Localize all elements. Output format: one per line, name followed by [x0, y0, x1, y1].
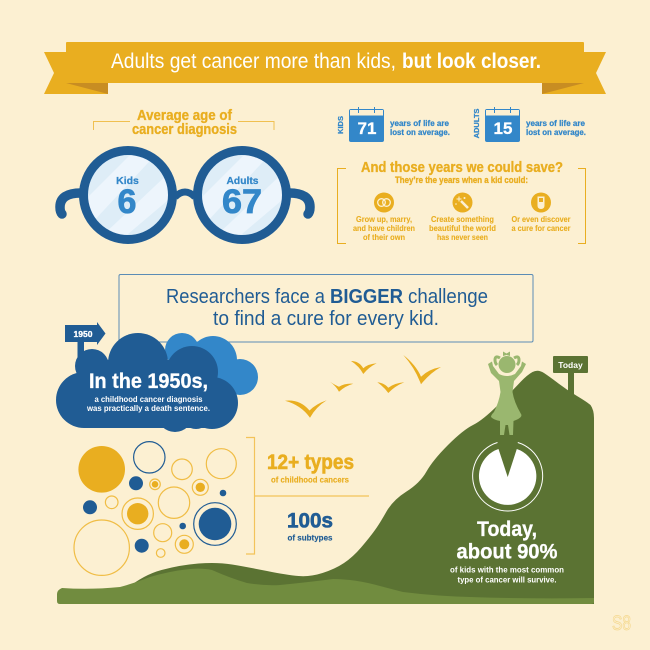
- caption: grow up: [353, 214, 415, 242]
- calendar stat: adults: ADULTS: [472, 109, 481, 138]
- pie chart: 90 percent: [473, 442, 543, 511]
- icon: girl: [488, 352, 526, 435]
- cloud: 1950s: was practically a death sentence.: [86, 403, 210, 413]
- sign: today: [553, 356, 588, 396]
- sign: 1950: [65, 322, 106, 366]
- calendar stat: kids: lost on average.: [390, 128, 450, 137]
- glasses: [60, 150, 310, 245]
- icon: test tube: [531, 192, 551, 212]
- bubbles: cancer types: [74, 442, 236, 575]
- stat: 100s: 100s: [287, 510, 333, 533]
- callout: researchers: Researchers face a: [166, 286, 326, 308]
- cloud: 1950s: a childhood cancer diagnosis: [94, 394, 203, 404]
- cloud: light blue: [165, 333, 258, 395]
- calendar stat: kids: years of life are: [390, 119, 449, 128]
- panel: years we could save: They’re the years when a kid could:: [395, 175, 528, 186]
- caption: grow up: of their own: [363, 232, 405, 242]
- icon: magic wand: [452, 192, 472, 212]
- sign: 1950: 1950: [74, 329, 93, 339]
- calendar stat: kids: [336, 107, 450, 142]
- caption: create something: Create something: [431, 214, 494, 224]
- calendar stat: adults: years of life are: [526, 119, 585, 128]
- callout: researchers: BIGGER: [330, 286, 404, 308]
- sign: today: Today: [558, 360, 583, 370]
- adults age: Adults: [226, 175, 259, 187]
- caption: grow up: Grow up, marry,: [356, 214, 412, 224]
- heading: average age: [94, 107, 274, 138]
- panel: years we could save: [338, 159, 586, 244]
- today stat text: about 90%: [456, 540, 558, 563]
- bracket and stats: types: [246, 438, 369, 554]
- title text: Adults get cancer more than kids,: [111, 50, 396, 73]
- caption: discover a cure: Or even discover: [512, 214, 571, 224]
- glasses: 67: [222, 183, 262, 221]
- title banner: [44, 42, 606, 94]
- cloud: 1950s: [56, 333, 238, 432]
- callout: researchers: challenge: [408, 286, 488, 308]
- panel: years we could save: And those years we could save?: [361, 159, 563, 176]
- title text: but look closer.: [402, 50, 541, 73]
- glasses: 6: [118, 183, 136, 221]
- calendar stat: kids: 71: [358, 119, 376, 138]
- callout: researchers: [119, 274, 533, 342]
- caption: discover a cure: [512, 214, 571, 233]
- today stat text: type of cancer will survive.: [458, 575, 556, 585]
- calendar stat: adults: [472, 107, 586, 142]
- heading: average age: cancer diagnosis: [132, 121, 237, 138]
- today stat text: Today,: [477, 518, 537, 541]
- caption: grow up: and have children: [353, 223, 415, 233]
- today stat text: of kids with the most common: [450, 565, 564, 575]
- icon: wedding rings: [374, 192, 394, 212]
- cloud text: In the 1950s,: [89, 370, 208, 393]
- bracket and stats: types: of childhood cancers: [271, 475, 349, 485]
- heading: average age: Average age of: [137, 107, 233, 124]
- caption: create something: has never seen: [437, 232, 488, 242]
- callout: researchers: to find a cure for every kid.: [213, 308, 439, 330]
- birds: [285, 355, 441, 418]
- calendar stat: adults: lost on average.: [526, 128, 586, 137]
- caption: create something: beautiful the world: [429, 223, 496, 233]
- calendar stat: adults: 15: [494, 119, 512, 138]
- kids age: Kids: [116, 175, 139, 187]
- foreground hill: [57, 569, 594, 604]
- logo: S8: [612, 612, 631, 635]
- caption: create something: [429, 214, 496, 242]
- stat: 12+ types: 12+ types: [267, 451, 354, 474]
- calendar stat: kids: KIDS: [336, 116, 345, 134]
- bracket and stats: types: of subtypes: [288, 533, 333, 543]
- today stat text: [450, 518, 564, 585]
- mountain: dark hill: [125, 371, 594, 604]
- caption: discover a cure: a cure for cancer: [512, 223, 571, 233]
